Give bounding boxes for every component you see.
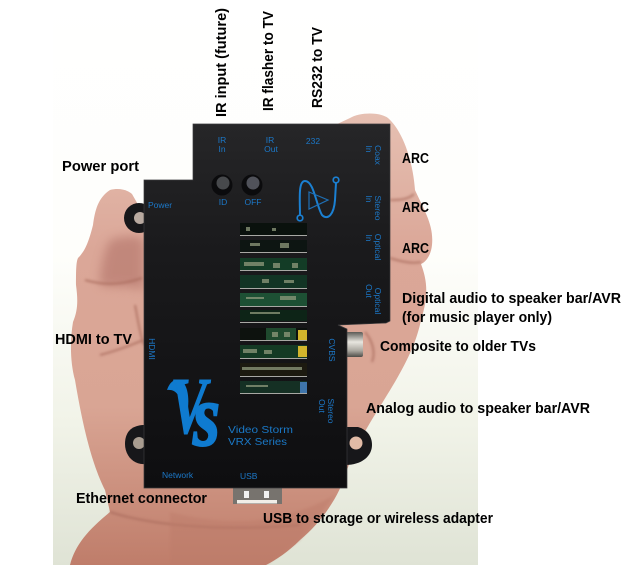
brand text: VRX Series bbox=[228, 436, 287, 448]
composite RCA connector bbox=[346, 332, 363, 357]
device port labels: HDMI bbox=[147, 338, 157, 360]
device port labels: USB bbox=[240, 471, 258, 481]
callout: digital audio: Digital audio to speaker bar/AVR bbox=[402, 291, 622, 307]
finger creases bbox=[85, 194, 421, 528]
mounting ear: top left bbox=[124, 203, 154, 233]
USB connector bbox=[233, 488, 282, 504]
button: OFF bbox=[242, 174, 262, 196]
callout: digital audio: (for music player only) bbox=[402, 310, 552, 326]
device port labels: Out bbox=[264, 144, 278, 154]
device port labels: CVBS bbox=[327, 338, 337, 362]
callout: RS232: RS232 to TV bbox=[310, 27, 326, 108]
device port labels: Optical bbox=[373, 288, 383, 314]
callout: IR flasher: IR flasher to TV bbox=[261, 11, 277, 111]
Vs logo: s bbox=[192, 368, 220, 465]
Vs logo: V bbox=[170, 363, 211, 451]
icon: blue squiggle logo bbox=[297, 177, 339, 221]
device port labels: Coax bbox=[373, 145, 383, 166]
device port labels: In bbox=[364, 234, 374, 242]
callout: USB: USB to storage or wireless adapter bbox=[263, 511, 493, 527]
finger shading bbox=[100, 236, 144, 290]
button: ID bbox=[212, 174, 232, 196]
mounting ear: bottom left bbox=[125, 425, 145, 464]
device port labels: 232 bbox=[306, 136, 320, 146]
ventilation slots with circuit board bbox=[240, 223, 307, 394]
callout: analog audio: Analog audio to speaker bar/AVR bbox=[366, 401, 591, 417]
device port labels: Stereo bbox=[326, 398, 336, 424]
device port labels: Out bbox=[364, 284, 374, 298]
device port labels: Out bbox=[317, 399, 327, 413]
callout: Ethernet: Ethernet connector bbox=[76, 491, 207, 507]
callout: HDMI: HDMI to TV bbox=[55, 332, 132, 348]
device port labels: Stereo bbox=[373, 195, 383, 221]
mounting ear: bottom right bbox=[345, 427, 372, 465]
device body bbox=[144, 124, 390, 488]
callout: digital audio bbox=[402, 291, 622, 326]
device port labels: IR bbox=[266, 135, 274, 145]
photo background bbox=[53, 0, 478, 565]
device port labels: In bbox=[364, 145, 374, 153]
device port labels bbox=[147, 135, 383, 481]
callout: ARC optical: ARC bbox=[402, 241, 429, 257]
callout: IR input: IR input (future) bbox=[214, 8, 230, 117]
device port labels: OFF bbox=[244, 197, 262, 207]
callout: ARC stereo: ARC bbox=[402, 200, 429, 216]
callout: composite: Composite to older TVs bbox=[380, 339, 536, 355]
device port labels: ID bbox=[219, 197, 227, 207]
device port labels: Power bbox=[148, 200, 172, 210]
brand text bbox=[228, 424, 293, 448]
brand text: Video Storm bbox=[228, 424, 293, 436]
hand bbox=[70, 114, 432, 565]
device port labels: In bbox=[364, 195, 374, 203]
device port labels: Network bbox=[162, 470, 194, 480]
device port labels: IR bbox=[218, 135, 226, 145]
callout: ARC coax: ARC bbox=[402, 151, 429, 167]
device port labels: Optical bbox=[373, 234, 383, 260]
device port labels: In bbox=[218, 144, 226, 154]
callout: power port: Power port bbox=[62, 159, 139, 175]
